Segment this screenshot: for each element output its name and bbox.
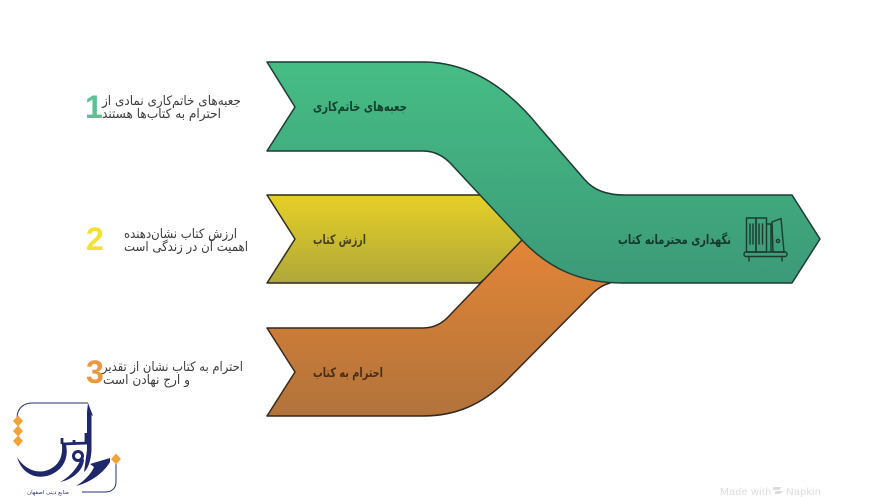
logo: Ravis calligraphy (13, 403, 121, 496)
number 3: 3 (86, 354, 104, 390)
description 2 (124, 227, 248, 255)
description 1: جعبه‌های خاتم‌کاری نمادی از (101, 94, 241, 109)
label: yellow band: ارزش کتاب (313, 233, 366, 248)
number 2: 2 (86, 221, 104, 257)
description 2: ارزش کتاب نشان‌دهنده (124, 227, 237, 242)
logo: Ravis calligraphy: منابع دینی اصفهان (27, 490, 69, 496)
description 2: اهمیت آن در زندگی است (124, 238, 248, 255)
band: green arrow (267, 62, 820, 283)
description 1 (101, 94, 241, 122)
description 3: و ارج نهادن است (103, 373, 190, 388)
label: green band: جعبه‌های خاتم‌کاری (313, 100, 407, 115)
band: yellow arrow (267, 195, 530, 283)
label: merged green arrow: نگهداری محترمانه کتاب (618, 232, 731, 248)
description 3: احترام به کتاب نشان از تقدیر (101, 360, 243, 375)
watermark: Made with Napkin (720, 486, 821, 497)
description 1: احترام به کتاب‌ها هستند (102, 107, 221, 122)
description 3 (101, 360, 243, 388)
number 1: 1 (85, 89, 103, 125)
icon: books on a shelf (744, 218, 787, 261)
band: orange arrow (267, 240, 610, 416)
label: orange band: احترام به کتاب (313, 366, 383, 381)
